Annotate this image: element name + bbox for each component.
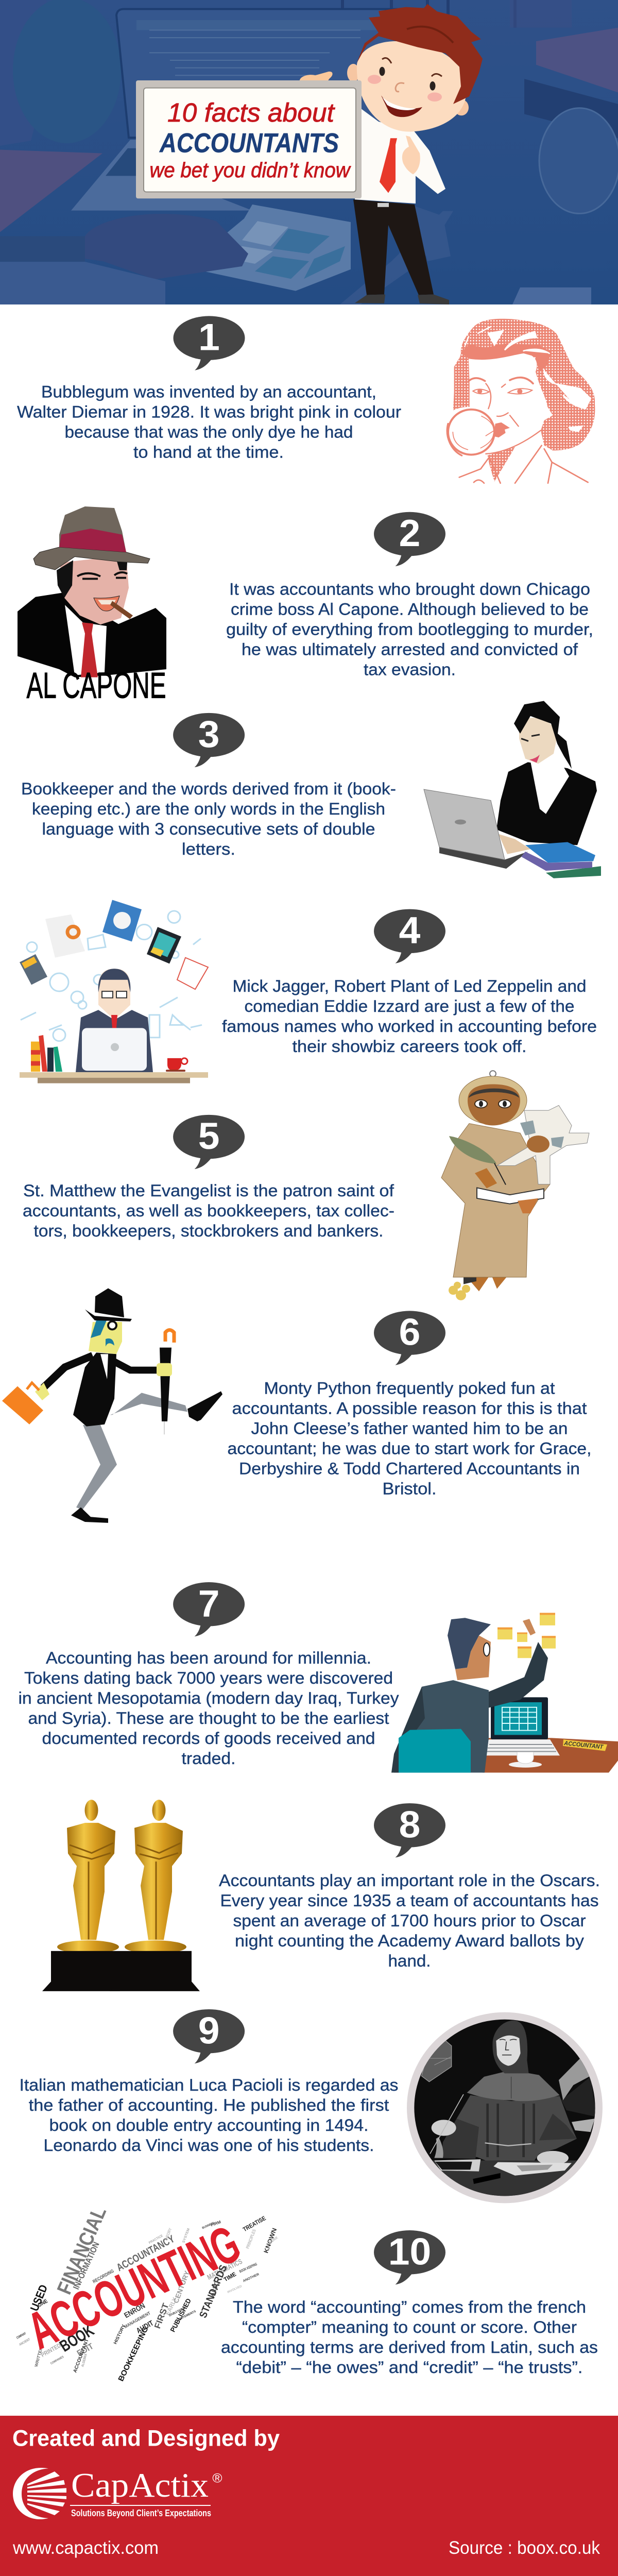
illustration: accounting word cloud: ALSO: [208, 2280, 221, 2297]
slate: [434, 2159, 480, 2172]
head: [98, 969, 130, 1020]
ears: [347, 64, 359, 82]
fact 2 text: guilty of everything from bootlegging to murder,: [226, 620, 593, 639]
fact 7 text: in ancient Mesopotamia (modern day Iraq, Turkey: [19, 1688, 399, 1707]
fact 10 text: [221, 2297, 598, 2377]
chart document: [45, 914, 85, 958]
body: [76, 1010, 153, 1072]
bowler hat: [95, 1288, 124, 1317]
laptop: [82, 1028, 147, 1071]
fact 4 text: Mick Jagger, Robert Plant of Led Zeppelin and: [233, 976, 587, 995]
cape: [467, 2070, 560, 2101]
illustration: accounting word cloud: WORK: [268, 2235, 279, 2245]
illustration: accounting word cloud: EARLY: [164, 2296, 179, 2316]
fact 8 text: hand.: [388, 1951, 431, 1970]
eyes and cheeks: [379, 67, 385, 76]
books on desk: [31, 1042, 40, 1072]
fact 9 number bubble: 9: [198, 2009, 219, 2052]
face: [455, 1635, 491, 1680]
fact 6 number bubble: 6: [399, 1311, 420, 1353]
left statuette: [42, 1800, 120, 1991]
CapActix logo: [13, 2466, 222, 2519]
illustration: accounting word cloud: RECORDING: [92, 2268, 115, 2284]
fact 9 text: Leonardo da Vinci was one of his students.: [43, 2136, 374, 2155]
fact 6 text: Bristol.: [382, 1479, 437, 1498]
illustration: accounting word cloud: INVOLVED: [227, 2285, 243, 2294]
fact 8 text: Accountants play an important role in the Oscars.: [219, 1871, 600, 1890]
laptop: [439, 847, 528, 869]
desk: [483, 1738, 618, 1773]
fact 10 text: The word “accounting” comes from the french: [233, 2297, 586, 2316]
illustration: accounting word cloud: FINANCIAL: [53, 2204, 111, 2297]
fact 9 text: Italian mathematician Luca Pacioli is regarded as: [19, 2075, 398, 2094]
bubble: [448, 410, 494, 455]
fact 3 text: letters.: [182, 839, 235, 858]
coffee cup: [509, 1761, 542, 1768]
fact 4 text: comedian Eddie Izzard are just a few of the: [244, 996, 574, 1015]
illustration: Luca Pacioli portrait: [407, 2012, 603, 2203]
fact 6 text: accountants. A possible reason for this is that: [232, 1399, 587, 1417]
fact 6 text: accountant; he was due to start work for Grace,: [228, 1439, 591, 1458]
hands: [35, 1383, 49, 1400]
fact 8 number bubble: [374, 1803, 445, 1857]
fact 6 text: [228, 1379, 591, 1498]
fact 3 number bubble: [173, 713, 245, 767]
fact 7 text: Tokens dating back 7000 years were discovered: [24, 1668, 393, 1687]
illustration: woman blowing bubblegum: [447, 319, 595, 483]
book and hand: [477, 1188, 544, 1204]
feet and flowers: [466, 1276, 507, 1291]
title: [149, 98, 351, 182]
illustration: accountant with sticky notes: [391, 1613, 618, 1773]
notepad: [177, 958, 208, 989]
illustration: accounting word cloud: BOOK KEEPING: [238, 2262, 258, 2274]
shirt: [355, 109, 445, 204]
fact 1 text: Walter Diemar in 1928. It was bright pink in colour: [17, 402, 401, 421]
black case: [473, 2173, 501, 2184]
arms: [43, 1355, 93, 1388]
illustration: Monty Python walking accountant: [2, 1288, 222, 1523]
illustration: accounting word cloud: COMPANY: [16, 2332, 27, 2340]
illustration: accounting word cloud: TIME: [223, 2271, 237, 2283]
tablet: [147, 927, 181, 963]
fact 4 number bubble: 4: [399, 909, 420, 952]
website: www.capactix.com: [12, 2537, 159, 2558]
fact 10 text: accounting terms are derived from Latin, such as: [221, 2337, 598, 2357]
jacket: [73, 1352, 116, 1427]
name lettering: AL CAPONE: [27, 666, 166, 706]
nameplate: [563, 1739, 607, 1751]
man holding sign: [300, 4, 483, 304]
hair: [514, 701, 572, 769]
fact 8 text: spent an average of 1700 hours prior to Oscar: [233, 1911, 586, 1930]
suit: [18, 592, 166, 677]
books: [546, 866, 601, 878]
footer heading: Created and Designed by: [12, 2425, 280, 2451]
hair: [448, 1618, 491, 1669]
right statuette: [110, 1800, 200, 1991]
fact 8 text: night counting the Academy Award ballots by: [235, 1931, 585, 1950]
illustration: accounting word cloud: DOUBLE ENTRY: [168, 2308, 185, 2317]
hair: [453, 319, 595, 450]
illustration: accounting word cloud: STANDARDS: [197, 2263, 230, 2319]
illustration: woman at laptop: [424, 701, 601, 878]
fact 5 number bubble: 5: [198, 1115, 219, 1157]
doodles: [21, 911, 202, 1041]
blue book: [102, 900, 142, 942]
fact 6 text: Derbyshire & Todd Chartered Accountants in: [239, 1459, 580, 1478]
illustration: accounting word cloud: BOOKKEEPING: [117, 2326, 150, 2383]
footer: [0, 2416, 618, 2576]
main word: ACCOUNTING: [19, 2214, 249, 2360]
thumb hand on sign: [300, 72, 333, 95]
wordmark: CapActix: [71, 2466, 209, 2504]
fact 3 number bubble: 3: [198, 713, 219, 755]
fact 3 text: Bookkeeper and the words derived from it (book-: [21, 779, 396, 798]
head: [459, 1076, 527, 1125]
fact 1 text: to hand at the time.: [133, 443, 284, 461]
face: [519, 718, 557, 764]
header banner: [0, 0, 618, 304]
angel: [497, 1106, 589, 1184]
fact 10 text: “debit” – “he owes” and “credit” – “he trusts”.: [236, 2358, 583, 2377]
fact 10 number bubble: [374, 2230, 445, 2284]
fact 2 text: crime boss Al Capone. Although believed to be: [231, 600, 589, 619]
illustration: accounting word cloud: ONE: [37, 2298, 49, 2309]
umbrella: [160, 1348, 171, 1421]
raised arm: [489, 1642, 548, 1708]
right hand: [537, 2150, 569, 2163]
raised leg: [110, 1393, 187, 1415]
illustration: Al Capone: [18, 506, 166, 706]
face: [89, 1322, 122, 1354]
fact 2 text: tax evasion.: [364, 660, 456, 679]
fact 5 text: St. Matthew the Evangelist is the patron saint of: [23, 1181, 394, 1200]
illustration: accounting word cloud: [16, 2204, 279, 2383]
illustration: accounting word cloud: EDIT: [75, 2341, 95, 2358]
desk: [20, 1072, 208, 1078]
title: 10 facts about: [167, 98, 336, 127]
illustration: accounting word cloud: MANAGEMENT: [123, 2310, 151, 2329]
fact 7 text: and Syria). These are thought to be the earliest: [28, 1708, 389, 1727]
illustration: accounting word cloud: STATEMENTS: [177, 2310, 197, 2321]
tie: [380, 138, 397, 193]
hands: [499, 834, 530, 854]
belt: [485, 2143, 531, 2146]
illustration: accountant at desk with floating office icons: [20, 900, 208, 1083]
illustration: accounting word cloud: PRACTICE: [148, 2234, 164, 2245]
fact 1 text: because that was the only dye he had: [65, 422, 353, 441]
fact 2 text: he was ultimately arrested and convicted of: [242, 640, 578, 659]
left hand, quill, scroll: [434, 2137, 443, 2158]
illustration: accounting word cloud: FIRM: [210, 2219, 221, 2227]
registered mark: ®: [212, 2471, 222, 2486]
illustration: accounting word cloud: ANOTHER: [243, 2273, 260, 2283]
face lines: [469, 378, 533, 383]
fact 3 text: [21, 779, 396, 858]
illustration: accounting word cloud: HISTORY: [112, 2324, 126, 2345]
illustration: accounting word cloud: KNOWN: [262, 2227, 278, 2254]
fact 5 text: tors, bookkeepers, stockbrokers and bankers.: [34, 1221, 384, 1240]
fact 7 number bubble: [173, 1582, 245, 1636]
fact 2 number bubble: 2: [399, 512, 420, 554]
illustration: accounting word cloud: USED: [28, 2283, 50, 2313]
fact 7 number bubble: 7: [198, 1582, 219, 1624]
monitor: [491, 1697, 548, 1739]
illustration: accounting word cloud: INFORMATION: [71, 2241, 101, 2291]
illustration: accounting word cloud: CENTURY: [172, 2269, 191, 2304]
illustration: accounting word cloud: ANCIENT: [19, 2337, 31, 2347]
fact 9 number bubble: [173, 2009, 245, 2063]
tagline: Solutions Beyond Client’s Expectations: [71, 2507, 211, 2518]
illustration: accounting word cloud: ACCOUNTANT: [72, 2338, 90, 2374]
illustration: accounting word cloud: MATHEMATICS: [205, 2257, 244, 2281]
fact 1 number bubble: [173, 316, 245, 370]
fact 4 text: [222, 976, 597, 1056]
fact 10 text: “compter” meaning to count or score. Other: [242, 2317, 577, 2336]
face: [60, 555, 129, 624]
neck hair: [488, 447, 515, 482]
illustration: St. Matthew figure: [441, 1071, 589, 1300]
fact 5 text: accountants, as well as bookkeepers, tax collec-: [23, 1201, 394, 1220]
table: [432, 2161, 577, 2196]
illustration: accounting word cloud: PRINCIPLES: [245, 2228, 257, 2249]
mouth: [381, 95, 422, 117]
fact 7 text: documented records of goods received and: [42, 1728, 375, 1748]
fact 1 text: Bubblegum was invented by an accountant,: [41, 382, 376, 401]
fact 6 text: Monty Python frequently poked fun at: [264, 1379, 555, 1397]
fact 8 text: [219, 1871, 600, 1970]
briefcase: [2, 1386, 43, 1425]
hood: [492, 2021, 529, 2073]
fact 7 text: Accounting has been around for millennia.: [46, 1648, 371, 1667]
red cup: [167, 1058, 181, 1070]
trousers: [353, 199, 434, 295]
fact 9 text: the father of accounting. He published the first: [29, 2095, 389, 2114]
cigar: [110, 601, 133, 619]
illustration: accounting word cloud: PRINTED: [40, 2342, 62, 2359]
standing leg: [76, 1425, 117, 1510]
face: [357, 41, 467, 132]
lips: [493, 422, 510, 437]
illustration: accounting word cloud: AUDIT: [135, 2319, 155, 2335]
glasses: [484, 1643, 490, 1656]
title: ACCOUNTANTS: [159, 128, 339, 158]
fact 4 number bubble: [374, 909, 445, 963]
robe: [453, 2095, 577, 2161]
fact 7 text: [19, 1648, 399, 1768]
robe: [441, 1124, 550, 1277]
fact 10 number bubble: 10: [388, 2230, 431, 2273]
illustration: accounting word cloud: SYSTEM: [182, 2228, 191, 2244]
quill: [449, 1136, 496, 1164]
illustration: accounting word cloud: ACCOUNTANCY: [114, 2233, 177, 2274]
illustration: accounting word cloud: WRITTEN: [34, 2346, 44, 2367]
shoes: [355, 294, 449, 304]
fact 1 number bubble: 1: [198, 316, 220, 359]
jacket: [496, 762, 597, 845]
crystal: [421, 2040, 452, 2082]
fact 6 text: John Cleese’s father wanted him to be an: [251, 1419, 568, 1437]
calculator: [20, 954, 47, 985]
fact 8 number bubble: 8: [399, 1803, 420, 1845]
illustration: accounting word cloud: BUSINESS: [202, 2222, 215, 2230]
collar: [459, 446, 588, 483]
illustration: accounting word cloud: ALGEBRA: [81, 2353, 88, 2367]
laptop base: [483, 1739, 560, 1755]
hood ring: [490, 1071, 496, 1077]
header background photo: [0, 0, 618, 304]
illustration: accounting word cloud: BOOK: [56, 2321, 97, 2355]
fact 8 text: Every year since 1935 a team of accountants has: [220, 1891, 598, 1910]
fact 7 text: traded.: [181, 1749, 235, 1768]
fact 2 text: It was accountants who brought down Chicago: [229, 580, 590, 599]
illustration: Oscar statuettes: [42, 1800, 200, 1991]
fact 3 text: keeping etc.) are the only words in the English: [32, 799, 385, 818]
pointing hand: [402, 135, 420, 174]
illustration: accounting word cloud: COMPANIES: [50, 2355, 64, 2365]
right figure: [561, 2077, 596, 2117]
hair: [357, 4, 483, 104]
illustration: accountant with sticky notes: ACCOUNTANT: [563, 1739, 604, 1751]
fact 6 number bubble: [374, 1311, 445, 1365]
illustration: accounting word cloud: PUBLISHED: [169, 2297, 193, 2333]
open book: [493, 2162, 572, 2176]
hand holding note: [523, 1619, 536, 1635]
illustration: accounting word cloud: FIRST: [152, 2301, 171, 2330]
fact 5 text: [23, 1181, 394, 1240]
fact 9 text: book on double entry accounting in 1494.: [49, 2115, 369, 2134]
logo mark: [13, 2468, 66, 2519]
fact 3 text: language with 3 consecutive sets of double: [42, 819, 375, 838]
body: [394, 1680, 489, 1773]
illustration: accounting word cloud: TREATISE: [242, 2214, 267, 2233]
fact 9 text: [19, 2075, 398, 2155]
fact 2 text: [226, 580, 593, 679]
illustration: accounting word cloud: ENRON: [123, 2302, 147, 2320]
title: we bet you didn’t know: [149, 158, 351, 182]
hat: [59, 506, 126, 552]
illustration: accounting word cloud: THEORY: [164, 2227, 173, 2242]
source: Source : boox.co.uk: [449, 2537, 600, 2558]
fact 4 text: their showbiz careers took off.: [293, 1037, 527, 1056]
shoes: [187, 1391, 222, 1421]
sticky notes: [497, 1613, 556, 1658]
fact 4 text: famous names who worked in accounting before: [222, 1016, 597, 1036]
fact 5 number bubble: [173, 1115, 245, 1169]
fact 1 text: [17, 382, 401, 461]
face: [496, 2036, 521, 2066]
sign board: [136, 80, 362, 198]
chair: [399, 1729, 471, 1773]
fact 2 number bubble: [374, 512, 445, 566]
